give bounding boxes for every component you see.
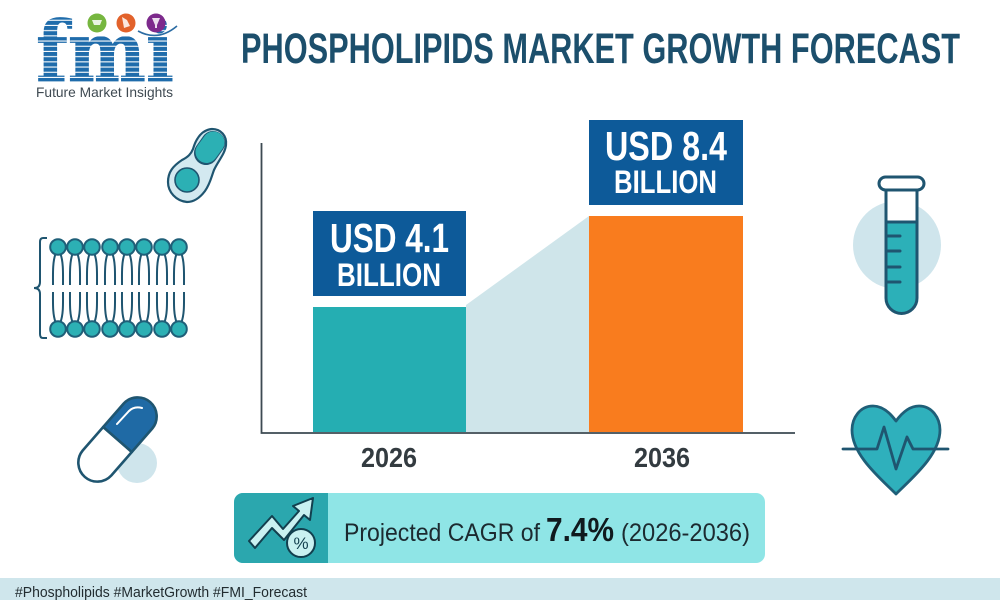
value label: 2036: USD 8.4: [605, 123, 727, 169]
icon: phospholipid capsule molecule: [168, 129, 226, 202]
value label: 2036: BILLION: [614, 164, 717, 200]
logo: FMI: [36, 3, 177, 101]
value label: 2026: BILLION: [337, 257, 441, 293]
bar: 2036: [589, 216, 743, 432]
value label: 2036: [589, 120, 743, 205]
year label: 2026: 2026: [361, 442, 417, 473]
membrane tails: [53, 254, 184, 322]
membrane heads: [50, 239, 187, 337]
chart axes: [262, 143, 795, 433]
callout icon panel: [234, 493, 328, 563]
footer band: [0, 578, 1000, 600]
icon: heart with pulse: [843, 406, 948, 494]
icon: capsule pill: [78, 397, 157, 483]
icon: test tube: [853, 177, 941, 313]
value label: 2026: USD 4.1: [330, 215, 449, 261]
icon: lipid bilayer membrane: [34, 238, 187, 338]
callout: projected CAGR: [234, 493, 765, 563]
logo globes: [88, 14, 177, 35]
growth area: [466, 216, 589, 432]
bar: 2026: [313, 307, 466, 432]
callout text: [344, 511, 750, 548]
membrane bracket: [34, 238, 47, 338]
logo letters: fmi: [36, 3, 174, 101]
icon: rising arrow with percent: [249, 498, 315, 557]
callout text: (2026-2036): [621, 519, 750, 547]
bar chart: [262, 120, 795, 473]
year label: 2036: 2036: [634, 442, 690, 473]
logo wordmark: Future Market Insights: [36, 84, 173, 100]
icon: rising arrow with percent: %: [293, 534, 309, 553]
callout text: Projected CAGR of: [344, 519, 540, 547]
callout text: 7.4%: [546, 511, 614, 548]
value label: 2026: [313, 211, 466, 296]
